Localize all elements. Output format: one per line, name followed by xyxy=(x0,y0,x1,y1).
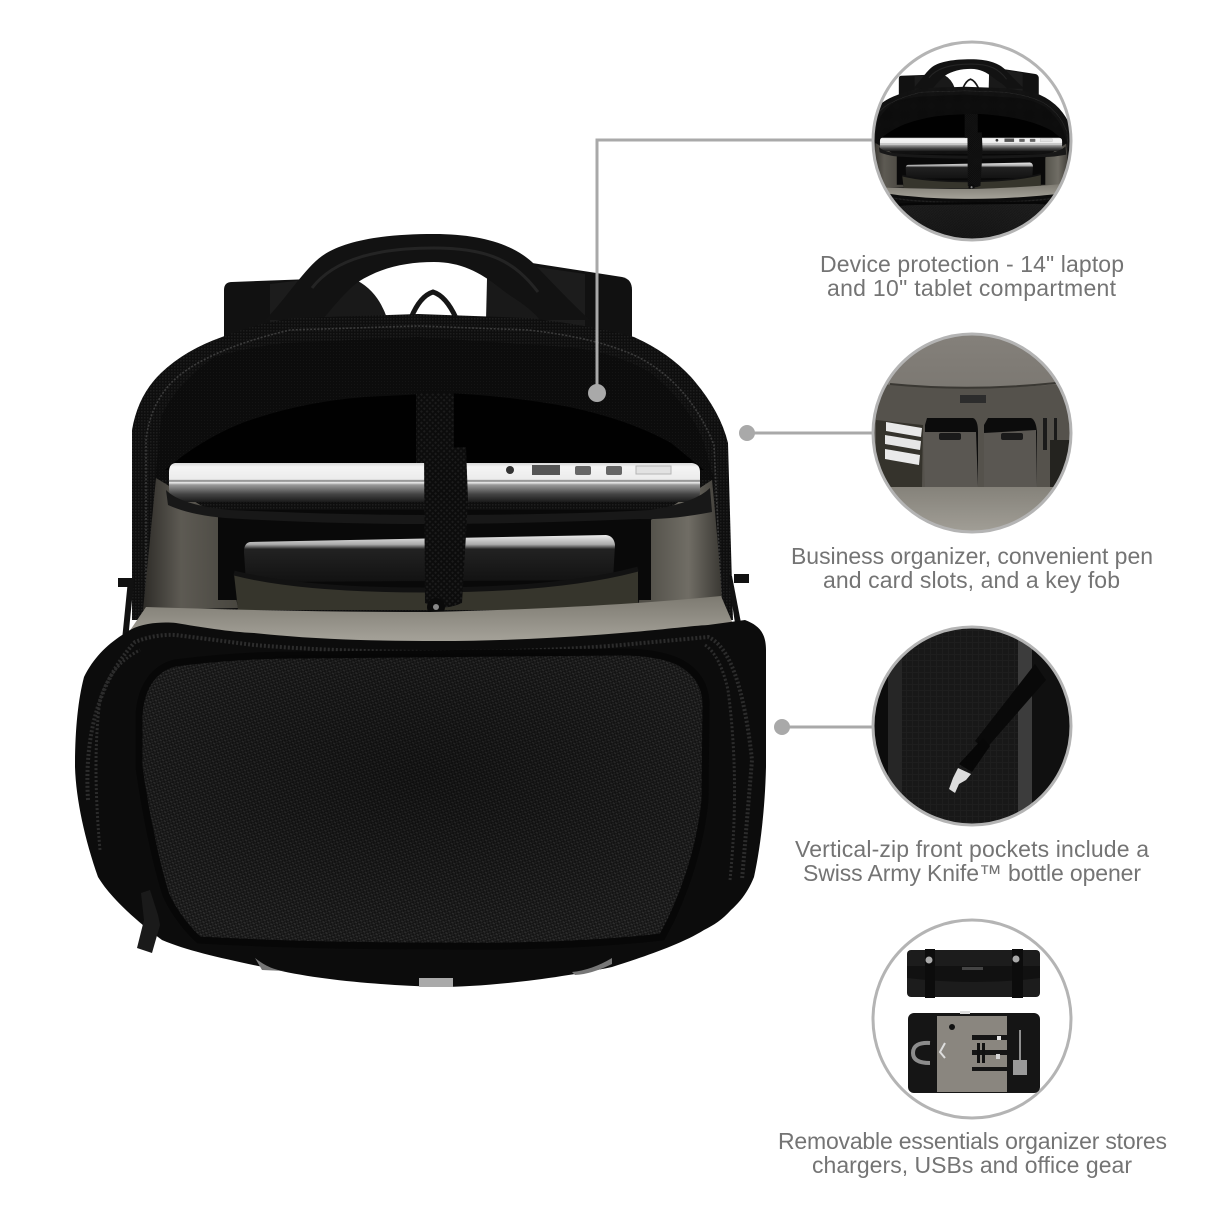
retention strap xyxy=(416,393,468,616)
pen and card slots xyxy=(876,420,923,487)
brand label xyxy=(960,395,986,403)
front lid xyxy=(75,620,766,987)
side zip pulls xyxy=(118,574,749,640)
USB adapter xyxy=(1019,1030,1021,1060)
feature text: business organizer: and card slots, and a key fob xyxy=(823,567,1120,593)
feature text: device protection: and 10" tablet compartment xyxy=(827,275,1117,301)
detail circle: essentials organizer xyxy=(873,920,1071,1118)
feature text: business organizer xyxy=(791,543,1153,593)
tan interior floor xyxy=(120,596,740,645)
top carry handle xyxy=(265,234,590,320)
feature text: vertical-zip pockets: Swiss Army Knife™ bottle opener xyxy=(803,860,1141,886)
laptop ports xyxy=(506,465,671,475)
bottom hardware xyxy=(255,958,612,987)
fleece lining xyxy=(155,337,714,480)
callout line 3 xyxy=(774,719,874,735)
detail circle: business organizer xyxy=(870,330,1075,535)
pens xyxy=(1043,418,1070,487)
laptop sleeve edge xyxy=(166,488,712,524)
detail circle: laptop compartment xyxy=(872,40,1072,242)
feature text: vertical-zip pockets: Vertical-zip front pockets include a xyxy=(795,836,1149,862)
rear pocket interior xyxy=(218,510,651,600)
main compartment shell xyxy=(132,314,733,620)
opened organizer xyxy=(908,1011,1040,1093)
lid zipper bands xyxy=(87,635,752,880)
back panel and shoulder straps xyxy=(224,263,632,345)
feature text: device protection xyxy=(820,251,1124,301)
callout line 1 xyxy=(588,140,874,402)
backpack open view xyxy=(75,234,766,987)
feature text: device protection: Device protection - 14" laptop xyxy=(820,251,1124,277)
zipper track xyxy=(146,326,722,610)
charger cable xyxy=(913,1043,930,1063)
feature text: vertical-zip pockets xyxy=(795,836,1149,886)
key strap xyxy=(975,668,1032,745)
tablet xyxy=(244,535,615,582)
inner shadow arc xyxy=(165,393,704,470)
feature text: essentials organizer: chargers, USBs and office gear xyxy=(812,1152,1132,1178)
strap loop xyxy=(411,292,456,318)
callout line 2 xyxy=(739,425,874,441)
feature text: essentials organizer xyxy=(778,1128,1167,1178)
detail circle: bottle opener pocket xyxy=(870,625,1077,830)
tablet pocket xyxy=(234,569,638,610)
feature text: essentials organizer: Removable essentials organizer stores xyxy=(778,1128,1167,1154)
mesh panel xyxy=(139,652,706,946)
phone pockets xyxy=(923,418,1037,487)
feature text: business organizer: Business organizer, convenient pen xyxy=(791,543,1153,569)
rolled organizer xyxy=(907,949,1040,998)
taupe side walls xyxy=(143,478,722,610)
zipper pull xyxy=(137,890,160,953)
bottle opener xyxy=(949,768,971,793)
buckle xyxy=(959,744,990,772)
laptop xyxy=(169,463,700,502)
